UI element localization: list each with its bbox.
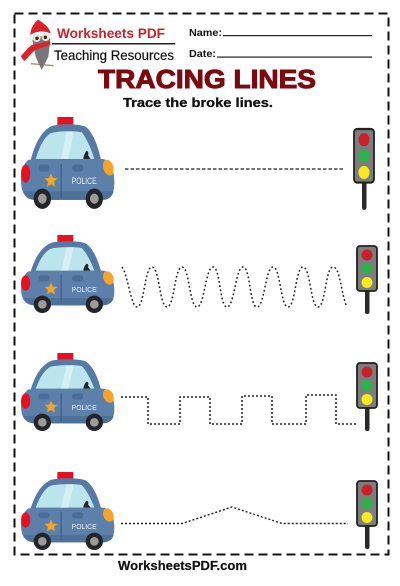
icon: police car 2 [21, 235, 116, 313]
icon: police car 1 [21, 117, 116, 209]
dotted wave line [122, 267, 347, 307]
icon: owl logo [21, 20, 54, 70]
footer website: WorksheetsPDF.com [118, 558, 247, 573]
icon: traffic light 2 [357, 246, 377, 314]
icon: police car 4: POLICE [72, 522, 97, 531]
logo subheading: Teaching Resources [54, 47, 174, 63]
icon: traffic light 1 [354, 129, 374, 210]
dashed straight line [125, 168, 345, 170]
icon: police car 2: POLICE [72, 285, 97, 294]
icon: police car 3: POLICE [72, 403, 97, 412]
logo heading: Worksheets PDF [57, 25, 165, 41]
icon: police car 4 [21, 472, 116, 550]
date field: Date: [189, 48, 216, 60]
icon: police car 1: POLICE [72, 177, 97, 186]
icon: traffic light 4 [357, 481, 377, 549]
title: TRACING LINES [98, 64, 316, 94]
icon: traffic light 3 [357, 363, 377, 431]
instructions: Trace the broke lines. [123, 95, 273, 110]
dotted square wave line [121, 395, 358, 424]
name field: Name: [189, 27, 222, 39]
dotted bump line [121, 507, 348, 524]
icon: police car 3 [21, 353, 116, 431]
logo rule [52, 43, 175, 44]
